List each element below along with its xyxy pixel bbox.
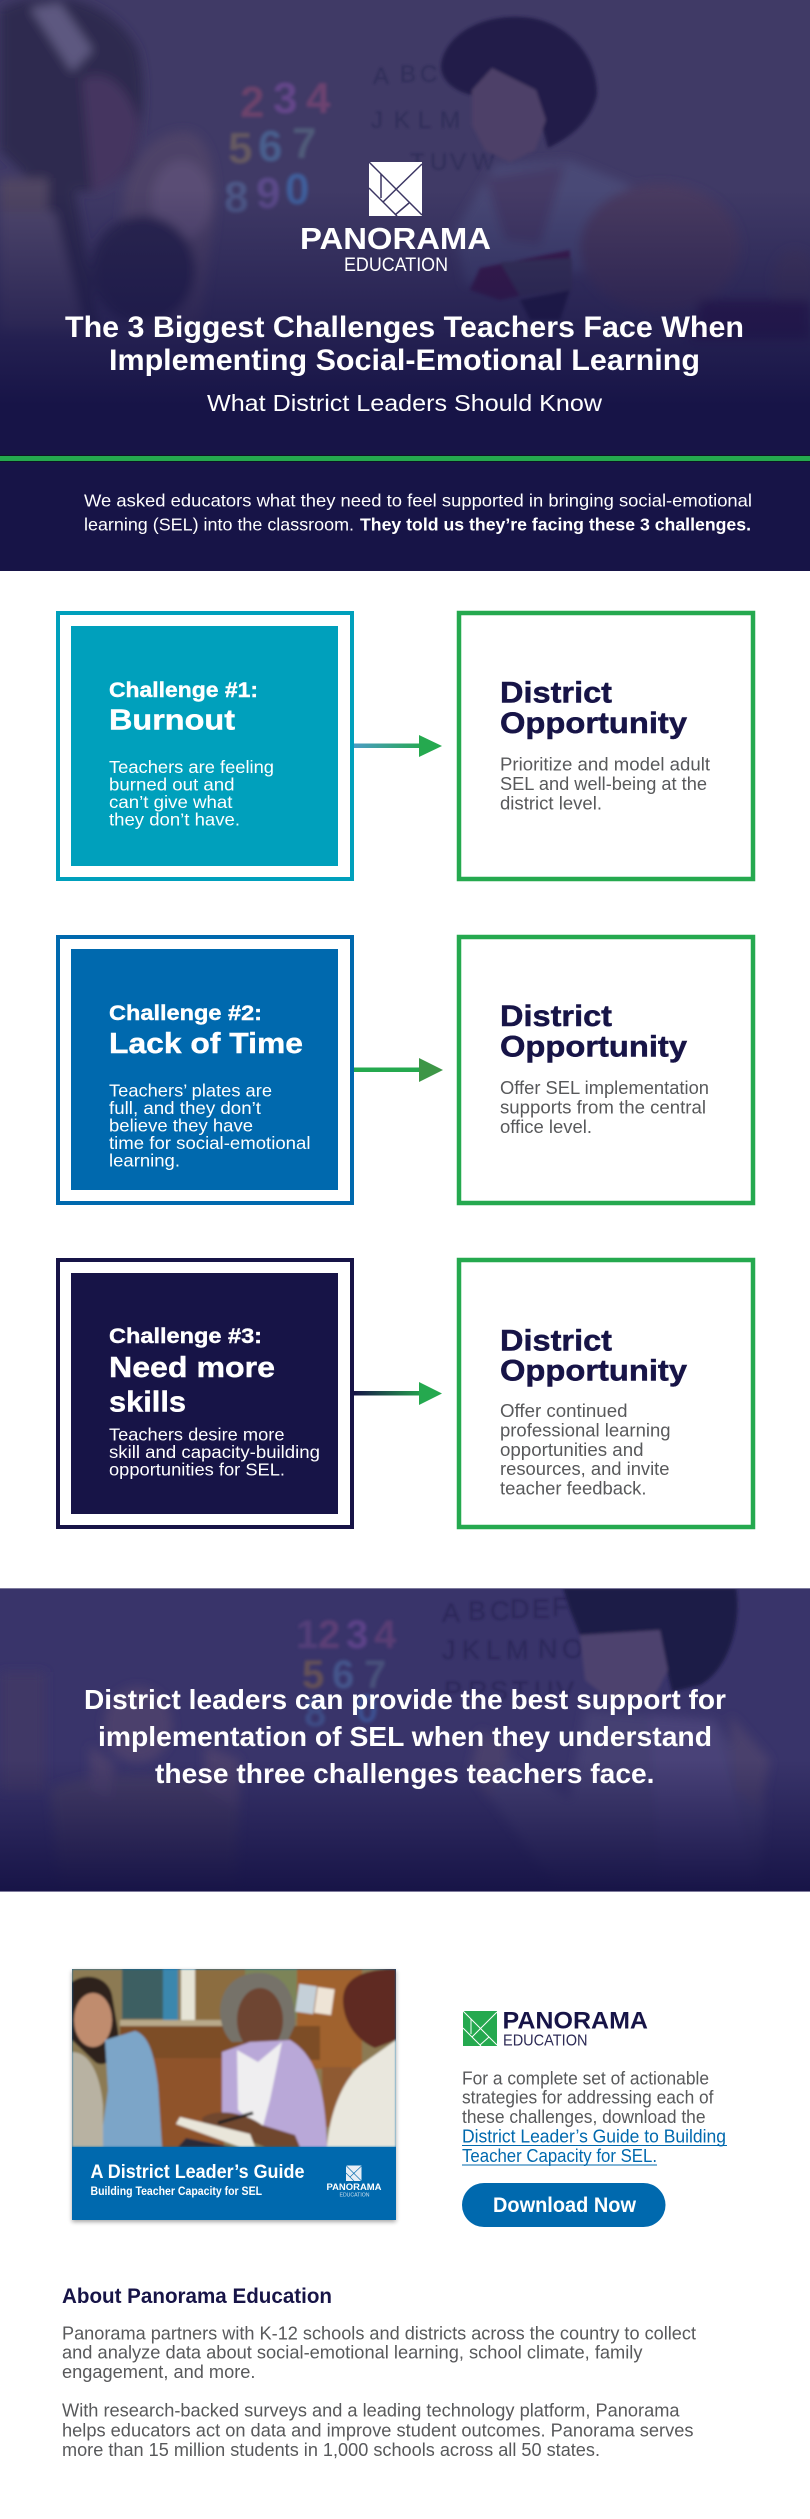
download description: For a complete set of actionable xyxy=(462,2068,709,2088)
challenge 2 panel xyxy=(58,937,352,1203)
banner background photo: T xyxy=(512,1676,528,1706)
opportunity 3 heading: District xyxy=(500,1324,612,1358)
banner background photo: K xyxy=(462,1635,480,1665)
opportunity 1 heading: Opportunity xyxy=(500,707,687,740)
opportunity 3 description: teacher feedback. xyxy=(500,1478,646,1498)
opportunity 2 panel xyxy=(459,937,753,1203)
left woman xyxy=(72,1977,119,2064)
boy xyxy=(91,216,195,324)
opportunity 3 heading xyxy=(500,1324,687,1388)
cover title: Building Teacher Capacity for SEL xyxy=(90,2186,262,2198)
hero background photo: classroom: J xyxy=(371,107,383,134)
download description: these challenges, download the xyxy=(462,2107,706,2127)
banner background photo: 1 xyxy=(296,1613,318,1657)
logo: Panorama Education white xyxy=(300,162,491,276)
hero background photo: classroom: V xyxy=(450,149,466,176)
banner background photo: 3 xyxy=(346,1613,368,1657)
about paragraph 1: and analyze data about social-emotional learning, school climate, family xyxy=(62,2342,643,2362)
challenge 1 description: burned out and xyxy=(109,774,234,794)
challenge 1 description: Teachers are feeling xyxy=(109,757,274,777)
intro text: We asked educators what they need to feel supported in bringing social-emotional xyxy=(84,490,752,510)
cover title xyxy=(90,2162,304,2198)
banner background photo: R xyxy=(468,1676,488,1706)
opportunity 3 description: Offer continued xyxy=(500,1401,628,1421)
banner background photo: J xyxy=(442,1635,456,1665)
opportunity 2 heading: Opportunity xyxy=(500,1030,687,1064)
opportunity 1 description: district level. xyxy=(500,794,602,814)
challenge 2 heading xyxy=(109,1001,303,1060)
hero background photo: classroom: 0 xyxy=(285,165,309,214)
challenge 2 description: time for social-emotional xyxy=(109,1133,310,1153)
subtitle: What District Leaders Should Know xyxy=(207,390,603,416)
challenge 3 description xyxy=(109,1424,320,1480)
challenge 1 panel xyxy=(58,613,352,879)
arrow 3 xyxy=(354,1382,442,1405)
opportunity 1 heading: District xyxy=(500,676,612,710)
challenge 3 description: opportunities for SEL. xyxy=(109,1460,285,1480)
hero background photo: classroom: M xyxy=(440,107,460,134)
teacher hair and face xyxy=(563,1588,737,1692)
download description: strategies for addressing each of xyxy=(462,2088,714,2108)
about paragraph 1: engagement, and more. xyxy=(62,2361,256,2382)
cover photo: three women talking xyxy=(72,1969,396,2147)
challenge 1 heading: Challenge #1: xyxy=(109,678,258,702)
download button xyxy=(462,2183,666,2227)
hero background photo: classroom: T xyxy=(410,149,425,176)
banner background photo: D xyxy=(510,1594,530,1624)
banner background photo: V xyxy=(556,1676,574,1706)
hero background photo: classroom: 5 xyxy=(228,124,252,173)
arrow 1 xyxy=(354,735,442,757)
opportunity 3 description: resources, and invite xyxy=(500,1459,670,1479)
opportunity 2 description: office level. xyxy=(500,1117,592,1137)
opportunity 3 heading: Opportunity xyxy=(500,1354,687,1388)
title: Implementing Social-Emotional Learning xyxy=(109,344,700,377)
challenge 1 heading: Burnout xyxy=(109,704,235,736)
closing banner xyxy=(0,1588,810,1892)
challenge 2 description: Teachers’ plates are xyxy=(109,1080,272,1100)
center woman xyxy=(220,1973,295,2042)
about paragraph 2 xyxy=(62,2400,694,2460)
hero background photo: classroom: B xyxy=(400,61,416,88)
child right xyxy=(580,188,727,271)
intro text: They told us they’re facing these 3 challenges. xyxy=(360,514,751,534)
banner message xyxy=(84,1684,726,1789)
hero background photo: classroom: 3 xyxy=(273,74,297,123)
guide link: Teacher Capacity for SEL. xyxy=(462,2146,657,2166)
hero panel xyxy=(0,0,810,571)
banner background photo: B xyxy=(468,1596,486,1626)
banner message: implementation of SEL when they understand xyxy=(98,1721,712,1752)
challenge 2 heading: Challenge #2: xyxy=(109,1001,262,1025)
intro text xyxy=(84,490,752,534)
challenge 1 heading xyxy=(109,678,258,736)
teacher face xyxy=(472,68,546,162)
opportunity 1 description xyxy=(500,754,710,814)
hero background photo: classroom: 9 xyxy=(256,169,280,218)
banner background photo xyxy=(56,1589,768,1825)
about heading: About Panorama Education xyxy=(62,2285,332,2308)
cover mini logo: EDUCATION xyxy=(340,2192,370,2198)
hero background photo: classroom: A xyxy=(373,63,389,90)
challenge 3 heading: Need more xyxy=(109,1352,275,1384)
download description xyxy=(462,2068,727,2166)
hero background photo: classroom: 8 xyxy=(224,173,248,222)
logo: Panorama Education white: EDUCATION xyxy=(344,255,448,276)
hero background photo: classroom: U xyxy=(430,149,447,176)
blonde girl xyxy=(122,132,215,330)
about paragraph 1 xyxy=(62,2322,696,2382)
challenge 3 heading xyxy=(109,1324,275,1418)
arrow 2 xyxy=(354,1058,443,1082)
banner background photo: 5 xyxy=(302,1653,324,1697)
challenge 2 heading: Lack of Time xyxy=(109,1028,303,1060)
guide cover xyxy=(72,1969,396,2222)
hero background photo: classroom xyxy=(0,0,810,340)
teacher shirt xyxy=(458,159,628,279)
hero background photo: classroom: 2 xyxy=(240,78,264,127)
opportunity 3 panel xyxy=(459,1260,753,1527)
opportunity 2 description: supports from the central xyxy=(500,1098,706,1118)
banner background photo: 0 xyxy=(356,1687,378,1731)
opportunity 1 panel xyxy=(459,613,753,879)
title: The 3 Biggest Challenges Teachers Face When xyxy=(65,311,744,344)
green divider xyxy=(0,455,810,462)
challenge 2 description xyxy=(109,1080,310,1170)
cover title: A District Leader’s Guide xyxy=(90,2162,304,2183)
banner background photo: F xyxy=(552,1592,568,1622)
opportunity 2 description: Offer SEL implementation xyxy=(500,1078,709,1098)
opportunity 1 description: SEL and well-being at the xyxy=(500,774,707,794)
logo: Panorama Education green: PANORAMA xyxy=(502,2008,648,2034)
challenge 3 heading: Challenge #3: xyxy=(109,1324,262,1348)
banner message: these three challenges teachers face. xyxy=(155,1758,654,1789)
about paragraph 1: Panorama partners with K-12 schools and districts across the country to collect xyxy=(62,2322,696,2344)
banner background photo: P xyxy=(444,1676,462,1706)
teacher hair xyxy=(441,17,597,148)
challenge 3 heading: skills xyxy=(109,1386,186,1418)
child xyxy=(104,1687,172,1763)
hero background photo: classroom: 7 xyxy=(292,119,316,168)
hero background photo: classroom: W xyxy=(472,149,495,176)
banner background photo: E xyxy=(532,1594,550,1624)
opportunity 2 heading xyxy=(500,1000,687,1064)
hero background photo: classroom: 6 xyxy=(258,122,282,171)
challenge 3 panel xyxy=(58,1260,352,1527)
banner background photo: M xyxy=(506,1635,528,1665)
about paragraph 2: more than 15 million students in 1,000 schools across all 50 states. xyxy=(62,2439,600,2460)
challenge 2 description: full, and they don’t xyxy=(109,1098,261,1118)
banner background photo: 8 xyxy=(304,1691,326,1735)
banner message: District leaders can provide the best support for xyxy=(84,1684,726,1715)
logo: Panorama Education white: PANORAMA xyxy=(300,221,491,256)
banner background photo: S xyxy=(490,1676,508,1706)
banner background photo: 4 xyxy=(374,1613,397,1657)
banner background photo: C xyxy=(490,1596,510,1626)
cover mini logo: PANORAMA xyxy=(326,2182,382,2193)
title xyxy=(65,311,744,377)
opportunity 3 description: opportunities and xyxy=(500,1440,644,1460)
banner background photo: 2 xyxy=(318,1613,340,1657)
opportunity 3 description: professional learning xyxy=(500,1420,670,1440)
right person xyxy=(343,1969,396,2048)
intro text: learning (SEL) into the classroom. xyxy=(84,514,354,534)
opportunity 2 description xyxy=(500,1078,709,1137)
challenge 1 description: they don’t have. xyxy=(109,810,240,830)
hero background photo: classroom: 4 xyxy=(306,74,331,123)
teacher body xyxy=(496,1713,760,1824)
banner background photo: U xyxy=(534,1676,554,1706)
guide link xyxy=(462,2126,727,2166)
opportunity 2 heading: District xyxy=(500,1000,612,1033)
hero background photo: classroom: C xyxy=(420,61,437,88)
opportunity 3 description xyxy=(500,1401,670,1498)
challenge 1 description: can’t give what xyxy=(109,792,233,812)
hero background photo: classroom: L xyxy=(418,107,431,134)
banner background photo: L xyxy=(486,1635,501,1665)
opportunity 1 description: Prioritize and model adult xyxy=(500,754,710,774)
challenge 1 description xyxy=(109,757,274,830)
banner background photo: 6 xyxy=(332,1653,354,1697)
challenge 3 description: skill and capacity-building xyxy=(109,1442,320,1462)
left girl xyxy=(0,0,143,330)
cover mini logo xyxy=(326,2166,382,2198)
opportunity 1 heading xyxy=(500,676,687,740)
challenge 2 description: learning. xyxy=(109,1150,180,1170)
banner background photo: O xyxy=(562,1634,583,1664)
hero background photo: classroom: K xyxy=(394,107,410,134)
challenge 2 description: believe they have xyxy=(109,1116,253,1136)
banner background photo: A xyxy=(442,1598,460,1628)
download button: Download Now xyxy=(493,2194,637,2217)
logo: Panorama Education green xyxy=(463,2008,648,2050)
about paragraph 2: helps educators act on data and improve student outcomes. Panorama serves xyxy=(62,2420,694,2440)
banner background photo: N xyxy=(538,1634,558,1664)
guide link: District Leader’s Guide to Building xyxy=(462,2126,726,2146)
logo: Panorama Education green: EDUCATION xyxy=(503,2032,588,2050)
banner background photo: 7 xyxy=(364,1653,386,1697)
about paragraph 2: With research-backed surveys and a leading technology platform, Panorama xyxy=(62,2400,680,2420)
challenge 3 description: Teachers desire more xyxy=(109,1424,284,1444)
